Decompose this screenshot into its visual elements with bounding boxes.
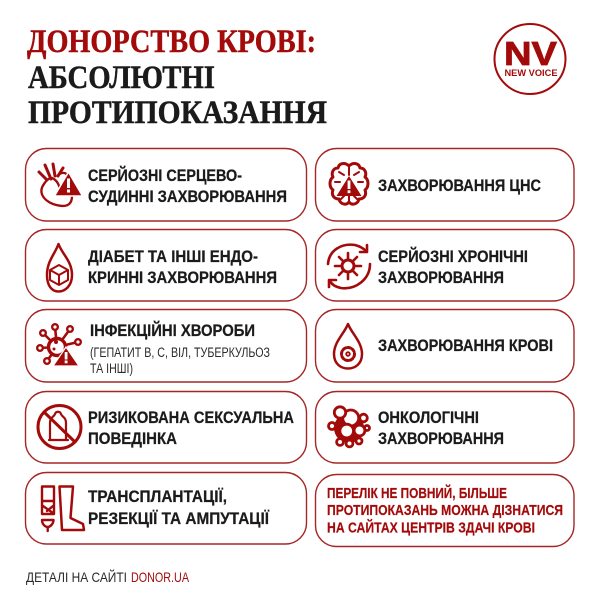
- icon: cycle with virus: [328, 245, 370, 288]
- panel: diabetes: [26, 230, 306, 301]
- icon: heart with warning: [39, 164, 82, 206]
- text: cardiovascular: СУДИННІ ЗАХВОРЮВАННЯ: [88, 188, 287, 206]
- icon: prohibited condom: [38, 406, 81, 448]
- panel: cardiovascular diseases: [26, 148, 306, 221]
- text: infectious: [90, 321, 270, 376]
- text: cardiovascular: [88, 166, 287, 206]
- text: risky behaviour: ПОВЕДІНКА: [88, 430, 177, 448]
- text: transplants: РЕЗЕКЦІЇ ТА АМПУТАЦІЇ: [88, 510, 269, 528]
- icon: medical vial and leg: [42, 486, 84, 531]
- panel: transplants and amputations: [26, 472, 306, 544]
- panel: CNS diseases: [316, 148, 574, 221]
- text: transplants: ТРАНСПЛАНТАЦІЇ,: [88, 488, 227, 506]
- title: [27, 24, 327, 131]
- text: oncological: ОНКОЛОГІЧНІ: [378, 409, 479, 427]
- panel: blood diseases: [316, 310, 574, 382]
- text: diabetes: КРИННІ ЗАХВОРЮВАННЯ: [88, 269, 277, 287]
- logo: NV New Voice: NV: [504, 35, 557, 72]
- title: ПРОТИПОКАЗАННЯ: [28, 95, 327, 131]
- icon: drop with cube: [47, 244, 72, 292]
- icon: virus with warning: [37, 324, 81, 366]
- text: infectious: (ГЕПАТИТ В, С, ВІЛ, ТУБЕРКУЛЬОЗ: [90, 345, 270, 360]
- text: oncological: [378, 409, 504, 448]
- panel: infectious diseases: [26, 310, 306, 382]
- text: blood: ЗАХВОРЮВАННЯ КРОВІ: [378, 337, 553, 355]
- logo: NV New Voice: [494, 24, 566, 94]
- logo: NV New Voice: NEW VOICE: [504, 68, 558, 79]
- text: oncological: ЗАХВОРЮВАННЯ: [378, 430, 504, 448]
- footer: source: [26, 568, 190, 585]
- text: risky behaviour: [88, 409, 294, 448]
- callout: list is not complete: НА САЙТАХ ЦЕНТРІВ ЗДАЧІ КРОВІ: [327, 518, 535, 536]
- icon: cancer cells: [328, 407, 370, 447]
- icon: drop with cell: [334, 324, 362, 368]
- callout: list is not complete: [316, 474, 574, 546]
- footer: source: DONOR.UA: [131, 569, 190, 585]
- text: infectious: ТА ІНШІ): [90, 361, 133, 376]
- text: chronic: СЕРЙОЗНІ ХРОНІЧНІ: [378, 247, 528, 266]
- text: diabetes: ДІАБЕТ ТА ІНШІ ЕНДО-: [88, 248, 258, 266]
- text: transplants: [88, 488, 269, 528]
- text: risky behaviour: РИЗИКОВАНА СЕКСУАЛЬНА: [88, 409, 294, 427]
- text: cardiovascular: СЕРЙОЗНІ СЕРЦЕВО-: [88, 166, 242, 185]
- icon: brain with warning: [330, 164, 368, 204]
- title: АБСОЛЮТНІ: [28, 60, 215, 96]
- text: CNS: ЗАХВОРЮВАННЯ ЦНС: [378, 177, 541, 195]
- footer: source: ДЕТАЛІ НА САЙТІ: [26, 568, 127, 585]
- text: chronic: ЗАХВОРЮВАННЯ: [378, 269, 504, 287]
- text: chronic: [378, 247, 528, 287]
- text: infectious: ІНФЕКЦІЙНІ ХВОРОБИ: [90, 321, 255, 340]
- text: diabetes: [88, 248, 277, 287]
- panel: oncological diseases: [316, 392, 574, 463]
- title: ДОНОРСТВО КРОВІ:: [27, 24, 316, 60]
- panel: chronic diseases: [316, 230, 574, 301]
- panel: risky sexual behaviour: [26, 392, 306, 463]
- callout: list is not complete: ПЕРЕЛІК НЕ ПОВНИЙ, БІЛЬШЕ: [327, 484, 507, 502]
